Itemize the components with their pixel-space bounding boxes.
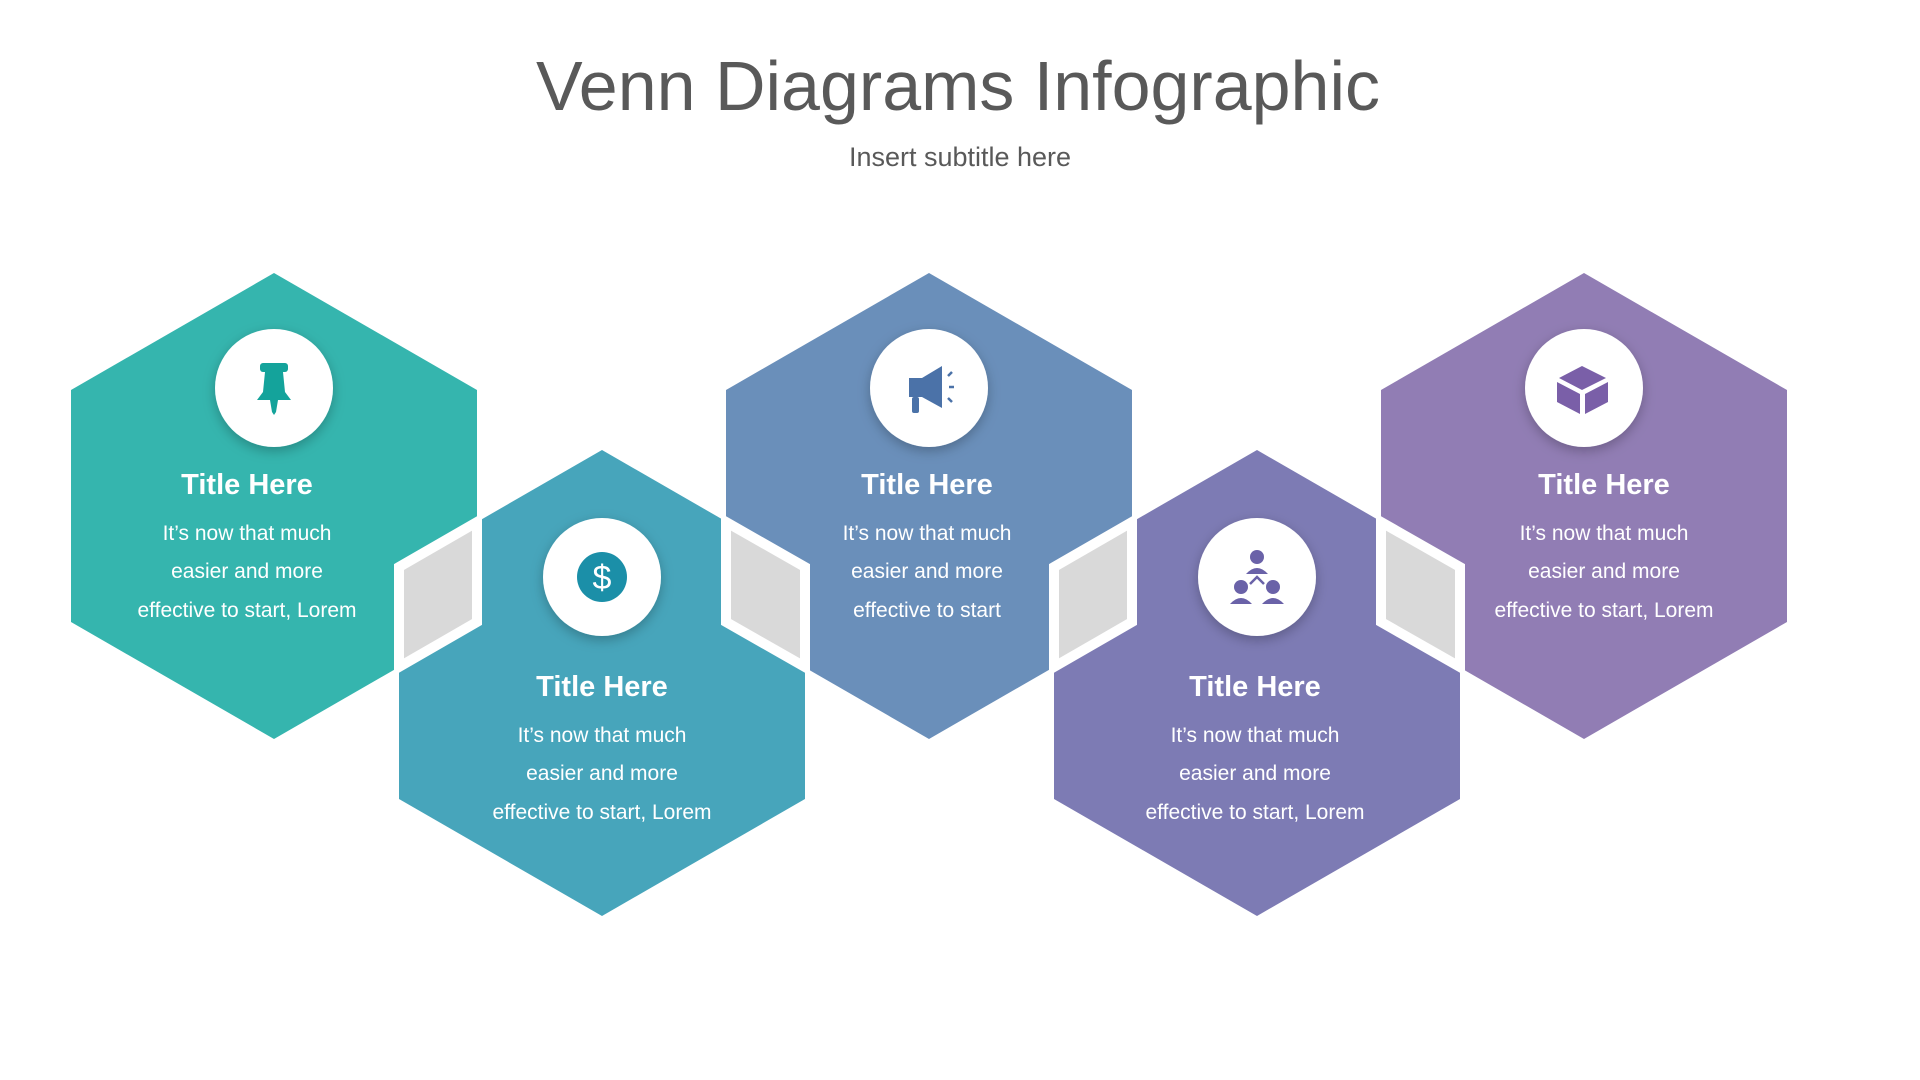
text block 3: effective to start (853, 599, 1001, 622)
icon: team (1198, 518, 1316, 636)
connector 2-3 (726, 522, 805, 667)
text block 2 (492, 671, 712, 824)
text block 3: Title Here (861, 469, 993, 501)
text block 1: Title Here (181, 469, 313, 501)
icon: box (1525, 329, 1643, 447)
subtitle: Insert subtitle here (849, 142, 1071, 172)
hexagon 5 (1381, 273, 1787, 739)
text block 5: Title Here (1538, 469, 1670, 501)
text block 4: easier and more (1179, 762, 1331, 785)
text block 2: It’s now that much (518, 724, 686, 747)
text block 5 (1494, 469, 1714, 622)
text block 2: Title Here (536, 671, 668, 703)
icon: pushpin (215, 329, 333, 447)
connector 3-4 (1054, 522, 1132, 667)
text block 4: It’s now that much (1171, 724, 1339, 747)
hexagon 1 (71, 273, 477, 739)
connector 1-2 (399, 522, 477, 667)
icon: dollar (543, 518, 661, 636)
icon: megaphone (870, 329, 988, 447)
icon: dollar: $ (593, 559, 612, 597)
text block 4: effective to start, Lorem (1145, 801, 1365, 824)
text block 1: It’s now that much (163, 522, 331, 545)
text block 5: It’s now that much (1520, 522, 1688, 545)
text block 4: Title Here (1189, 671, 1321, 703)
text block 1 (137, 469, 357, 622)
text block 1: easier and more (171, 560, 323, 583)
text block 3: easier and more (851, 560, 1003, 583)
hexagon 3 (726, 273, 1132, 739)
hexagon 4 (1054, 450, 1460, 916)
text block 2: effective to start, Lorem (492, 801, 712, 824)
text block 2: easier and more (526, 762, 678, 785)
text block 1: effective to start, Lorem (137, 599, 357, 622)
title: Venn Diagrams Infographic (536, 47, 1380, 125)
hexagon 2 (399, 450, 805, 916)
text block 3 (843, 469, 1011, 622)
text block 5: easier and more (1528, 560, 1680, 583)
text block 3: It’s now that much (843, 522, 1011, 545)
connector 4-5 (1381, 522, 1460, 667)
text block 4 (1145, 671, 1365, 824)
text block 5: effective to start, Lorem (1494, 599, 1714, 622)
